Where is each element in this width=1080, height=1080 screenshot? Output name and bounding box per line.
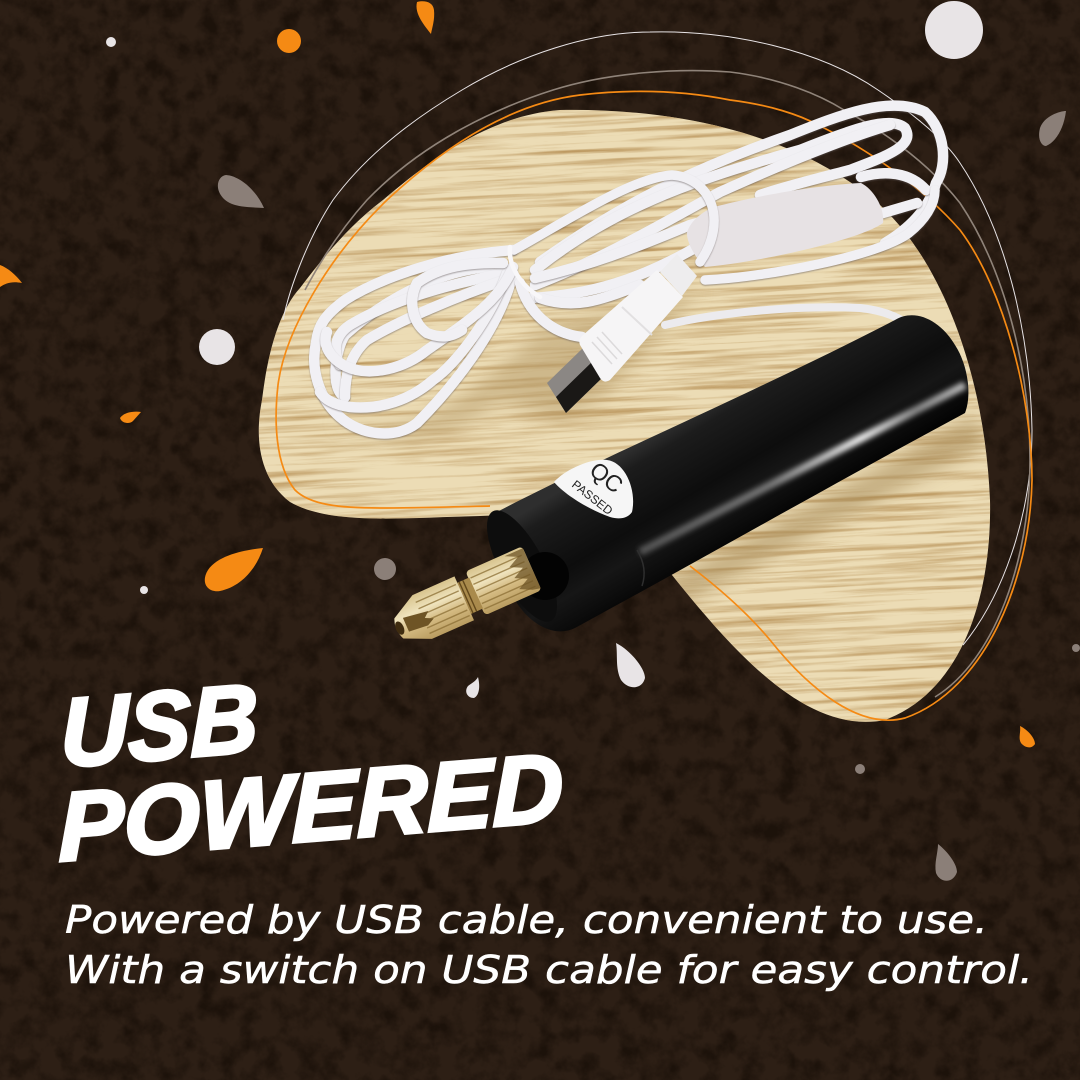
cable tie knot <box>510 247 540 297</box>
description line 1: Powered by USB cable, convenient to use. <box>65 898 988 942</box>
sticker text PASSED: PASSED <box>569 477 616 518</box>
chuck recess <box>521 552 569 600</box>
thin outline rings around blob <box>276 32 1032 720</box>
title: POWERED: POWERED <box>58 732 564 882</box>
inline switch housing <box>687 183 883 267</box>
front collar seam <box>637 550 644 586</box>
description line 2: With a switch on USB cable for easy control. <box>65 948 1033 992</box>
front cap <box>473 501 571 631</box>
title: USB: USB <box>60 663 259 788</box>
drill body <box>473 315 968 631</box>
USB plug <box>547 254 697 413</box>
plug white housing <box>579 270 683 382</box>
wood texture blob <box>258 110 990 722</box>
drop shadows under product <box>364 288 986 604</box>
cable over switch <box>514 175 935 280</box>
QC passed sticker <box>554 456 633 518</box>
description text <box>65 898 1033 992</box>
brass chuck <box>386 546 542 651</box>
strain relief <box>660 254 697 296</box>
wire to drill <box>665 307 908 325</box>
highlight strip <box>640 385 965 552</box>
plug metal tip <box>547 347 604 413</box>
sticker text QC: QC <box>585 456 628 498</box>
USB cable coil <box>314 106 943 433</box>
